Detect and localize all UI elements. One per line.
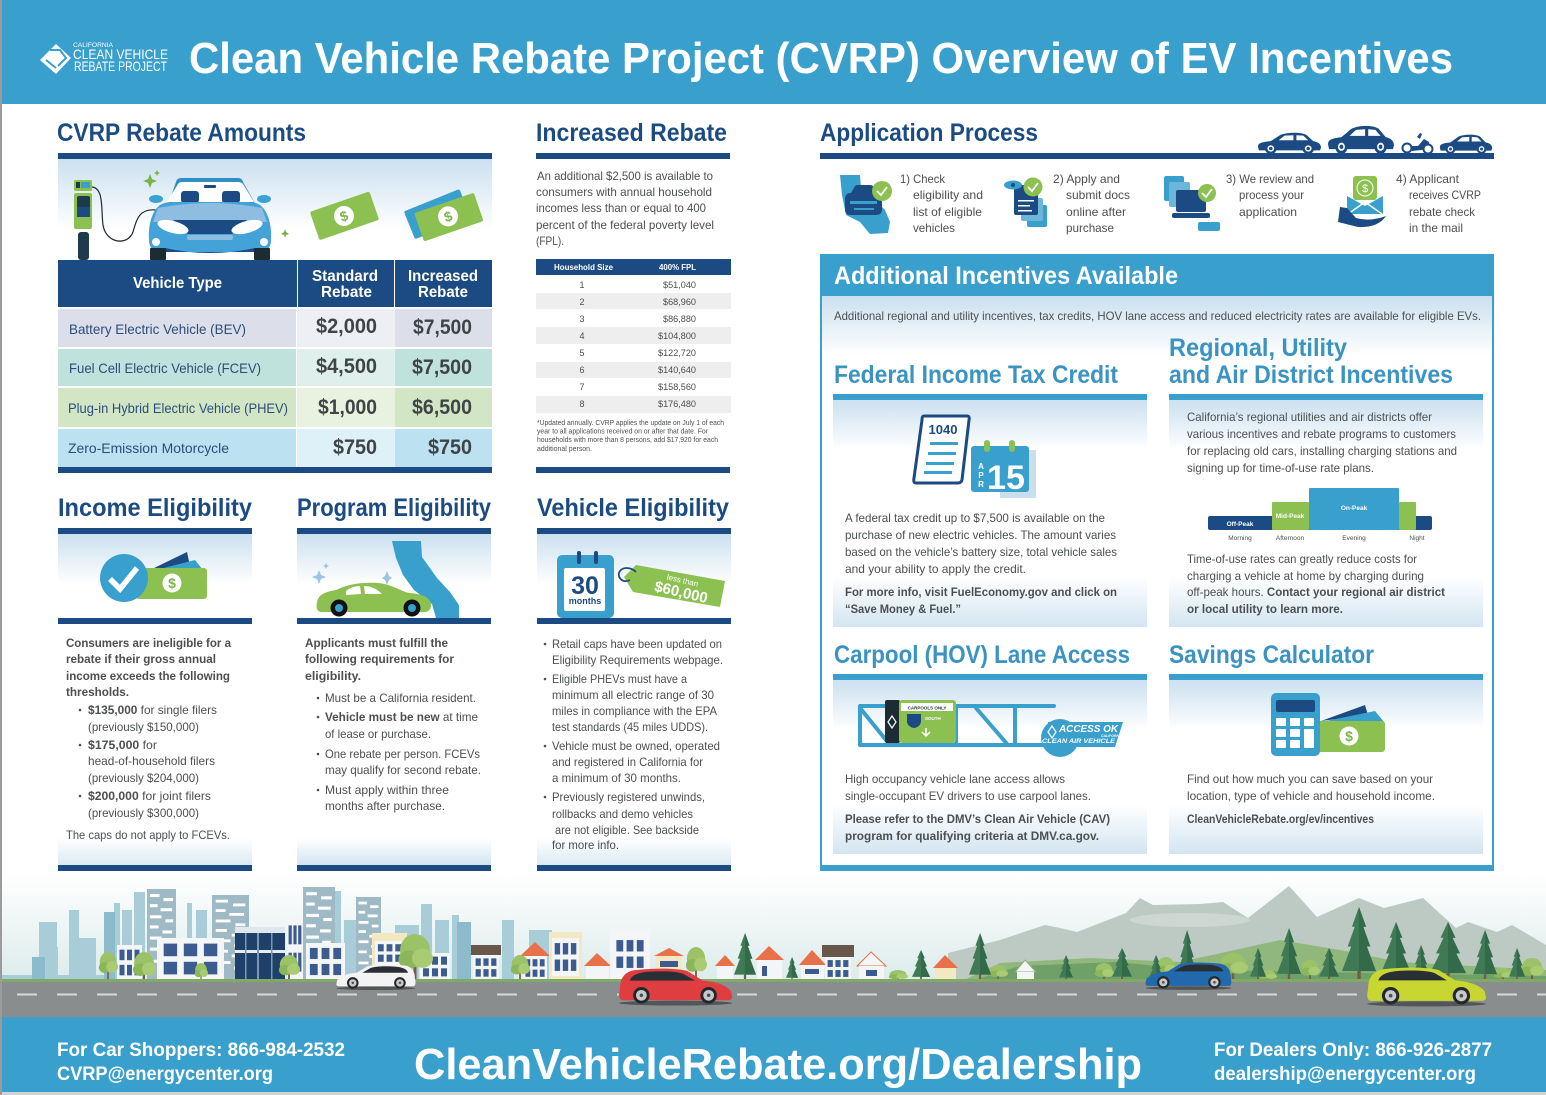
table: household size and FPL: $122,720 xyxy=(658,348,696,358)
text block: federal credit: and your ability to apply the credit. xyxy=(845,562,1026,576)
icon: single rebate bill xyxy=(310,191,379,240)
text block: program rules: Must apply within three xyxy=(325,783,449,797)
text block: income rules: (previously $300,000) xyxy=(88,806,199,820)
text block: increased rebate description xyxy=(536,169,714,248)
chart: time-of-use rates: Afternoon xyxy=(1276,535,1304,542)
row: BEV: Battery Electric Vehicle (BEV) xyxy=(69,321,246,337)
text block: vehicle rules: Retail caps have been updated on xyxy=(552,637,722,651)
text block: income rules: Consumers are ineligible for a xyxy=(66,636,231,650)
icon: overhead carpool sign: SOUTH xyxy=(925,716,941,721)
text block: savings xyxy=(1187,772,1435,826)
sub-panel: federal income tax credit: Federal Income Tax Credit xyxy=(834,361,1119,389)
table: household size and FPL: 7 xyxy=(579,382,585,392)
contact: car shoppers: CVRP@energycenter.org xyxy=(57,1064,273,1085)
rebate table: Rebate xyxy=(321,284,372,301)
step 3 xyxy=(1164,172,1314,231)
text block: carpool: High occupancy vehicle lane access allows xyxy=(845,772,1065,786)
table: household size and FPL: $104,800 xyxy=(658,331,696,341)
icon: price tag: less than xyxy=(666,573,699,589)
logo xyxy=(40,43,168,74)
road xyxy=(2,979,1546,1017)
table: household size and FPL: 2 xyxy=(579,297,585,307)
text block: federal credit: purchase of new electric vehicles. The amount varies xyxy=(845,528,1116,542)
text block: federal credit: A federal tax credit up to $7,500 is available on the xyxy=(845,511,1105,525)
sub-panel: regional utility and air district incentives: and Air District Incentives xyxy=(1169,361,1453,389)
step 1: 1) Check xyxy=(900,172,946,186)
text block: savings: CleanVehicleRebate.org/ev/incentives xyxy=(1187,812,1374,826)
icon: access ok sticker xyxy=(1041,719,1123,757)
panel: CVRP rebate amounts xyxy=(57,119,492,473)
table: household size and FPL xyxy=(536,259,731,413)
text block: program rules: Applicants must fulfill the xyxy=(305,636,448,650)
chart: time-of-use rates: Mid-Peak xyxy=(1276,513,1305,520)
table: household size and FPL: $176,480 xyxy=(658,399,696,409)
icon: tax form and calendar: A xyxy=(978,462,984,471)
panel: application process xyxy=(820,119,1494,235)
step 3: 3) We review and xyxy=(1226,172,1314,186)
text block: vehicle rules: miles in compliance with the EPA xyxy=(552,704,717,718)
text block: vehicle rules: rollbacks and demo vehicles xyxy=(552,807,693,821)
text block: program rules: may qualify for second rebate. xyxy=(325,763,481,777)
heading: Income Eligibility: Income Eligibility xyxy=(58,494,252,522)
icon: check and money xyxy=(100,552,207,602)
step 1: list of eligible xyxy=(913,205,982,219)
icon: overhead carpool sign: CARPOOLS ONLY xyxy=(908,706,946,710)
table: household size and FPL: 3 xyxy=(579,314,585,324)
text block: time-of-use rates: off-peak hours. Contact your regional air district xyxy=(1187,585,1445,599)
rebate table: Standard xyxy=(312,268,378,285)
text block: increased rebate description: incomes less than or equal to 400 xyxy=(536,201,706,215)
icon: access ok sticker: ACCESS OK xyxy=(1058,723,1119,735)
text block: program rules: eligibility. xyxy=(305,669,361,683)
icon: tax form and calendar xyxy=(914,416,1036,498)
text block: regional intro: California’s regional utilities and air districts offer xyxy=(1187,410,1432,424)
footnote: year to all applications received on or after that date. For xyxy=(537,428,709,436)
heading band: additional incentives: Additional Incentives Available xyxy=(834,262,1178,290)
step 1: eligibility and xyxy=(913,188,983,202)
heading: CVRP Rebate Amounts: CVRP Rebate Amounts xyxy=(57,119,306,147)
table: household size and FPL: $86,880 xyxy=(663,314,696,324)
contact: car shoppers xyxy=(57,1040,345,1085)
icon: tax form and calendar: 1040 xyxy=(929,422,957,437)
row: BEV: $7,500 xyxy=(413,316,472,339)
chart: time-of-use rates: Evening xyxy=(1342,535,1366,542)
heading: Program Eligibility: Program Eligibility xyxy=(297,494,491,522)
text block: income rules: head-of-household filers xyxy=(88,754,215,768)
icon: calculator and money xyxy=(1271,693,1385,756)
text block: vehicle rules: Eligibility Requirements webpage. xyxy=(552,653,723,667)
step 4: receives CVRP xyxy=(1409,188,1481,202)
illustration: charger and car xyxy=(74,170,289,260)
sub-panel: carpool lane access xyxy=(833,641,1147,854)
icon row: eligible vehicles xyxy=(1258,126,1492,154)
text block: carpool xyxy=(845,772,1110,843)
step 2 xyxy=(1004,172,1130,235)
footnote: *Updated annually. CVRP applies the update on July 1 of each xyxy=(537,420,724,427)
text block: increased rebate description: (FPL). xyxy=(536,234,564,248)
table: household size and FPL: 6 xyxy=(579,365,585,375)
row: FCEV: Fuel Cell Electric Vehicle (FCEV) xyxy=(69,360,261,376)
text block: federal credit: For more info, visit FuelEconomy.gov and click on xyxy=(845,585,1117,599)
text block: income rules: (previously $150,000) xyxy=(88,720,199,734)
icon: access ok sticker: CALIFORNIA xyxy=(1101,734,1123,738)
rebate table: Rebate xyxy=(418,284,468,301)
sub-panel: carpool lane access: Carpool (HOV) Lane Access xyxy=(834,641,1130,669)
text block: income rules: $200,000 for joint filers xyxy=(88,789,211,803)
text block: carpool: Please refer to the DMV’s Clean Air Vehicle (CAV) xyxy=(845,812,1110,826)
heading: Vehicle Eligibility: Vehicle Eligibility xyxy=(537,494,729,522)
row: BEV: $2,000 xyxy=(316,315,377,338)
sub-panel: federal income tax credit xyxy=(833,361,1147,627)
text block: regional intro: for replacing old cars, installing charging stations and xyxy=(1187,444,1457,458)
chart: time-of-use rates: Off-Peak xyxy=(1227,521,1254,528)
table: household size and FPL: Household Size xyxy=(554,263,614,272)
logo: REBATE PROJECT xyxy=(74,58,167,74)
table: household size and FPL: 5 xyxy=(579,348,585,358)
text block: program rules: following requirements for xyxy=(305,652,454,666)
step 4: rebate check xyxy=(1409,205,1476,219)
text block: vehicle rules: minimum all electric range of 30 xyxy=(552,688,714,702)
table: household size and FPL: 4 xyxy=(579,331,585,341)
skyline xyxy=(2,887,552,980)
chart: time-of-use rates: Night xyxy=(1409,535,1425,542)
logo: CLEAN VEHICLE xyxy=(73,46,168,62)
text block: federal credit: based on the vehicle’s battery size, total vehicle sales xyxy=(845,545,1117,559)
text block: federal credit xyxy=(845,511,1117,616)
text block: increased rebate description: percent of the federal poverty level xyxy=(536,218,714,232)
icon: tax form and calendar: R xyxy=(978,480,984,489)
row: PHEV xyxy=(58,388,492,427)
text block: income rules: $175,000 for xyxy=(88,738,157,752)
text block: vehicle rules: and registered in California for xyxy=(552,755,703,769)
step 3: process your xyxy=(1239,188,1304,202)
sub-panel: savings calculator xyxy=(1169,641,1483,854)
row: FCEV xyxy=(58,349,492,386)
text block: program rules: Vehicle must be new at time xyxy=(325,710,478,724)
text block: vehicle rules: a minimum of 30 months. xyxy=(552,771,681,785)
text block: vehicle rules: for more info. xyxy=(552,838,619,852)
step 4: 4) Applicant xyxy=(1396,172,1460,186)
houses xyxy=(471,929,1036,980)
icon: calendar 30 months xyxy=(557,551,614,618)
chart: time-of-use rates: Morning xyxy=(1228,535,1252,542)
step 1: vehicles xyxy=(913,221,955,235)
text block: regional intro: various incentives and rebate programs to customers xyxy=(1187,427,1456,441)
text block: increased rebate description: An additional $2,500 is available to xyxy=(537,169,713,183)
icon: single rebate bill: $ xyxy=(338,207,350,225)
icon: calendar 30 months: 30 xyxy=(571,572,599,600)
text block: vehicle rules: are not eligible. See backside xyxy=(555,823,699,837)
footnote xyxy=(537,420,724,453)
icon: overhead carpool sign xyxy=(860,700,1054,745)
text block: regional intro xyxy=(1187,410,1457,475)
text block: vehicle rules: Eligible PHEVs must have a xyxy=(552,672,687,686)
text block: time-of-use rates xyxy=(1187,552,1445,616)
table: household size and FPL: $51,040 xyxy=(663,280,696,290)
website address: CleanVehicleRebate.org/Dealership xyxy=(414,1040,1142,1089)
text block: carpool: single-occupant EV drivers to use carpool lanes. xyxy=(845,789,1091,803)
heading band: additional incentives xyxy=(820,254,1494,296)
table: household size and FPL: 400% FPL xyxy=(659,263,696,272)
icon: California and green car xyxy=(312,541,459,618)
text block: vehicle rules: Previously registered unwinds, xyxy=(552,790,705,804)
chart: time-of-use rates xyxy=(1208,488,1432,542)
text block: income rules: $135,000 for single filers xyxy=(88,703,217,717)
text block: income rules: thresholds. xyxy=(66,685,129,699)
row: FCEV: $7,500 xyxy=(412,356,472,379)
step 2: online after xyxy=(1066,205,1126,219)
footnote: additional person. xyxy=(537,446,592,453)
row: PHEV: $6,500 xyxy=(412,396,472,419)
panel: program eligibility xyxy=(297,494,491,871)
icon: check and money: $ xyxy=(168,575,176,591)
table: household size and FPL: $140,640 xyxy=(658,365,696,375)
text block: income rules: income exceeds the following xyxy=(66,669,230,683)
contact: dealers: For Dealers Only: 866-926-2877 xyxy=(1214,1040,1492,1061)
step 3: application xyxy=(1239,205,1297,219)
contact: car shoppers: For Car Shoppers: 866-984-2532 xyxy=(57,1040,345,1061)
step 4: in the mail xyxy=(1409,221,1463,235)
sub-panel: regional utility and air district incentives: Regional, Utility xyxy=(1169,334,1347,362)
rebate table: Increased xyxy=(408,268,478,285)
heading: Increased Rebate: Increased Rebate xyxy=(536,119,727,147)
text block: vehicle rules xyxy=(544,637,723,852)
logo: CALIFORNIA xyxy=(73,43,113,49)
text block: time-of-use rates: or local utility to learn more. xyxy=(1187,602,1343,616)
text block: program rules: of lease or purchase. xyxy=(325,727,431,741)
text block: savings: location, type of vehicle and household income. xyxy=(1187,789,1435,803)
table: household size and FPL: 8 xyxy=(579,399,585,409)
panel: income eligibility xyxy=(58,494,252,871)
step 4: $ xyxy=(1362,183,1368,195)
icon: calendar 30 months: months xyxy=(569,596,601,606)
icon: tax form and calendar: P xyxy=(978,471,984,480)
text block: increased rebate description: consumers with annual household xyxy=(536,185,712,199)
text block: vehicle rules: test standards (45 miles UDDS). xyxy=(552,720,708,734)
table: household size and FPL: 1 xyxy=(579,280,585,290)
footer banner xyxy=(2,1017,1546,1095)
icon: price tag: $60,000 xyxy=(653,578,709,607)
table: household size and FPL: $68,960 xyxy=(663,297,696,307)
text block: program rules: months after purchase. xyxy=(325,799,445,813)
table: household size and FPL: $158,560 xyxy=(658,382,696,392)
step 1 xyxy=(840,172,983,235)
illustration: city to countryside road scene xyxy=(2,873,1546,1017)
text block: income rules: (previously $204,000) xyxy=(88,771,199,785)
sub-panel: savings calculator: Savings Calculator xyxy=(1169,641,1374,669)
panel: additional incentives xyxy=(820,254,1494,871)
text block: income rules: rebate if their gross annual xyxy=(66,652,216,666)
rebate table xyxy=(58,260,492,473)
row: motorcycle: $750 xyxy=(333,436,377,459)
icon: price tag xyxy=(619,565,725,607)
row: motorcycle: $750 xyxy=(428,436,472,459)
contact: dealers xyxy=(1214,1040,1492,1085)
contact: dealers: dealership@energycenter.org xyxy=(1214,1064,1476,1085)
icon: tax form and calendar: 15 xyxy=(987,459,1025,497)
text block: time-of-use rates: Time-of-use rates can greatly reduce costs for xyxy=(1187,552,1417,566)
text block: carpool: program for qualifying criteria at DMV.ca.gov. xyxy=(845,829,1099,843)
row: BEV xyxy=(58,309,492,347)
text block: program rules: Must be a California resident. xyxy=(325,691,476,705)
chart: time-of-use rates: On-Peak xyxy=(1341,505,1368,512)
step 2: 2) Apply and xyxy=(1053,172,1120,186)
row: PHEV: Plug-in Hybrid Electric Vehicle (PHEV) xyxy=(68,400,288,416)
row: motorcycle: Zero-Emission Motorcycle xyxy=(68,440,229,456)
header banner xyxy=(2,0,1546,104)
icon: calculator and money: $ xyxy=(1345,728,1353,744)
mountains xyxy=(948,886,1546,982)
text block: income rules: The caps do not apply to FCEVs. xyxy=(66,828,230,842)
intro text: Additional regional and utility incentives, tax credits, HOV lane access and reduced electricity rates are available for eligible EVs. xyxy=(834,309,1481,323)
step 2: submit docs xyxy=(1066,188,1130,202)
text block: income rules xyxy=(66,636,231,842)
trees xyxy=(99,907,1544,984)
text block: federal credit: “Save Money & Fuel.” xyxy=(845,602,961,616)
step 2: purchase xyxy=(1066,221,1114,235)
panel: increased rebate xyxy=(536,119,731,473)
text block: savings: Find out how much you can save based on your xyxy=(1187,772,1433,786)
row: FCEV: $4,500 xyxy=(316,355,377,378)
panel: vehicle eligibility xyxy=(537,494,731,871)
row: motorcycle xyxy=(58,429,492,467)
text block: regional intro: signing up for time-of-use rate plans. xyxy=(1187,461,1374,475)
footnote: households with more than 8 persons, add $17,920 for each xyxy=(537,437,718,444)
title: Clean Vehicle Rebate Project (CVRP) Overview of EV Incentives xyxy=(189,34,1453,83)
icon: double rebate bills: $ xyxy=(442,207,455,225)
text block: time-of-use rates: charging a vehicle at home by charging during xyxy=(1187,569,1424,583)
sub-panel: regional utility and air district incentives xyxy=(1169,334,1483,627)
vehicles on road xyxy=(336,962,1486,1006)
icon: access ok sticker: CLEAN AIR VEHICLE xyxy=(1042,738,1116,745)
text block: program rules: One rebate per person. FCEVs xyxy=(325,747,480,761)
heading: Application Process: Application Process xyxy=(820,119,1038,147)
row: PHEV: $1,000 xyxy=(318,396,377,419)
icon: double rebate bills xyxy=(404,189,484,242)
text block: program rules xyxy=(305,636,481,813)
step 4 xyxy=(1338,172,1481,235)
text block: vehicle rules: Vehicle must be owned, operated xyxy=(552,739,720,753)
rebate table: Vehicle Type xyxy=(133,275,222,292)
